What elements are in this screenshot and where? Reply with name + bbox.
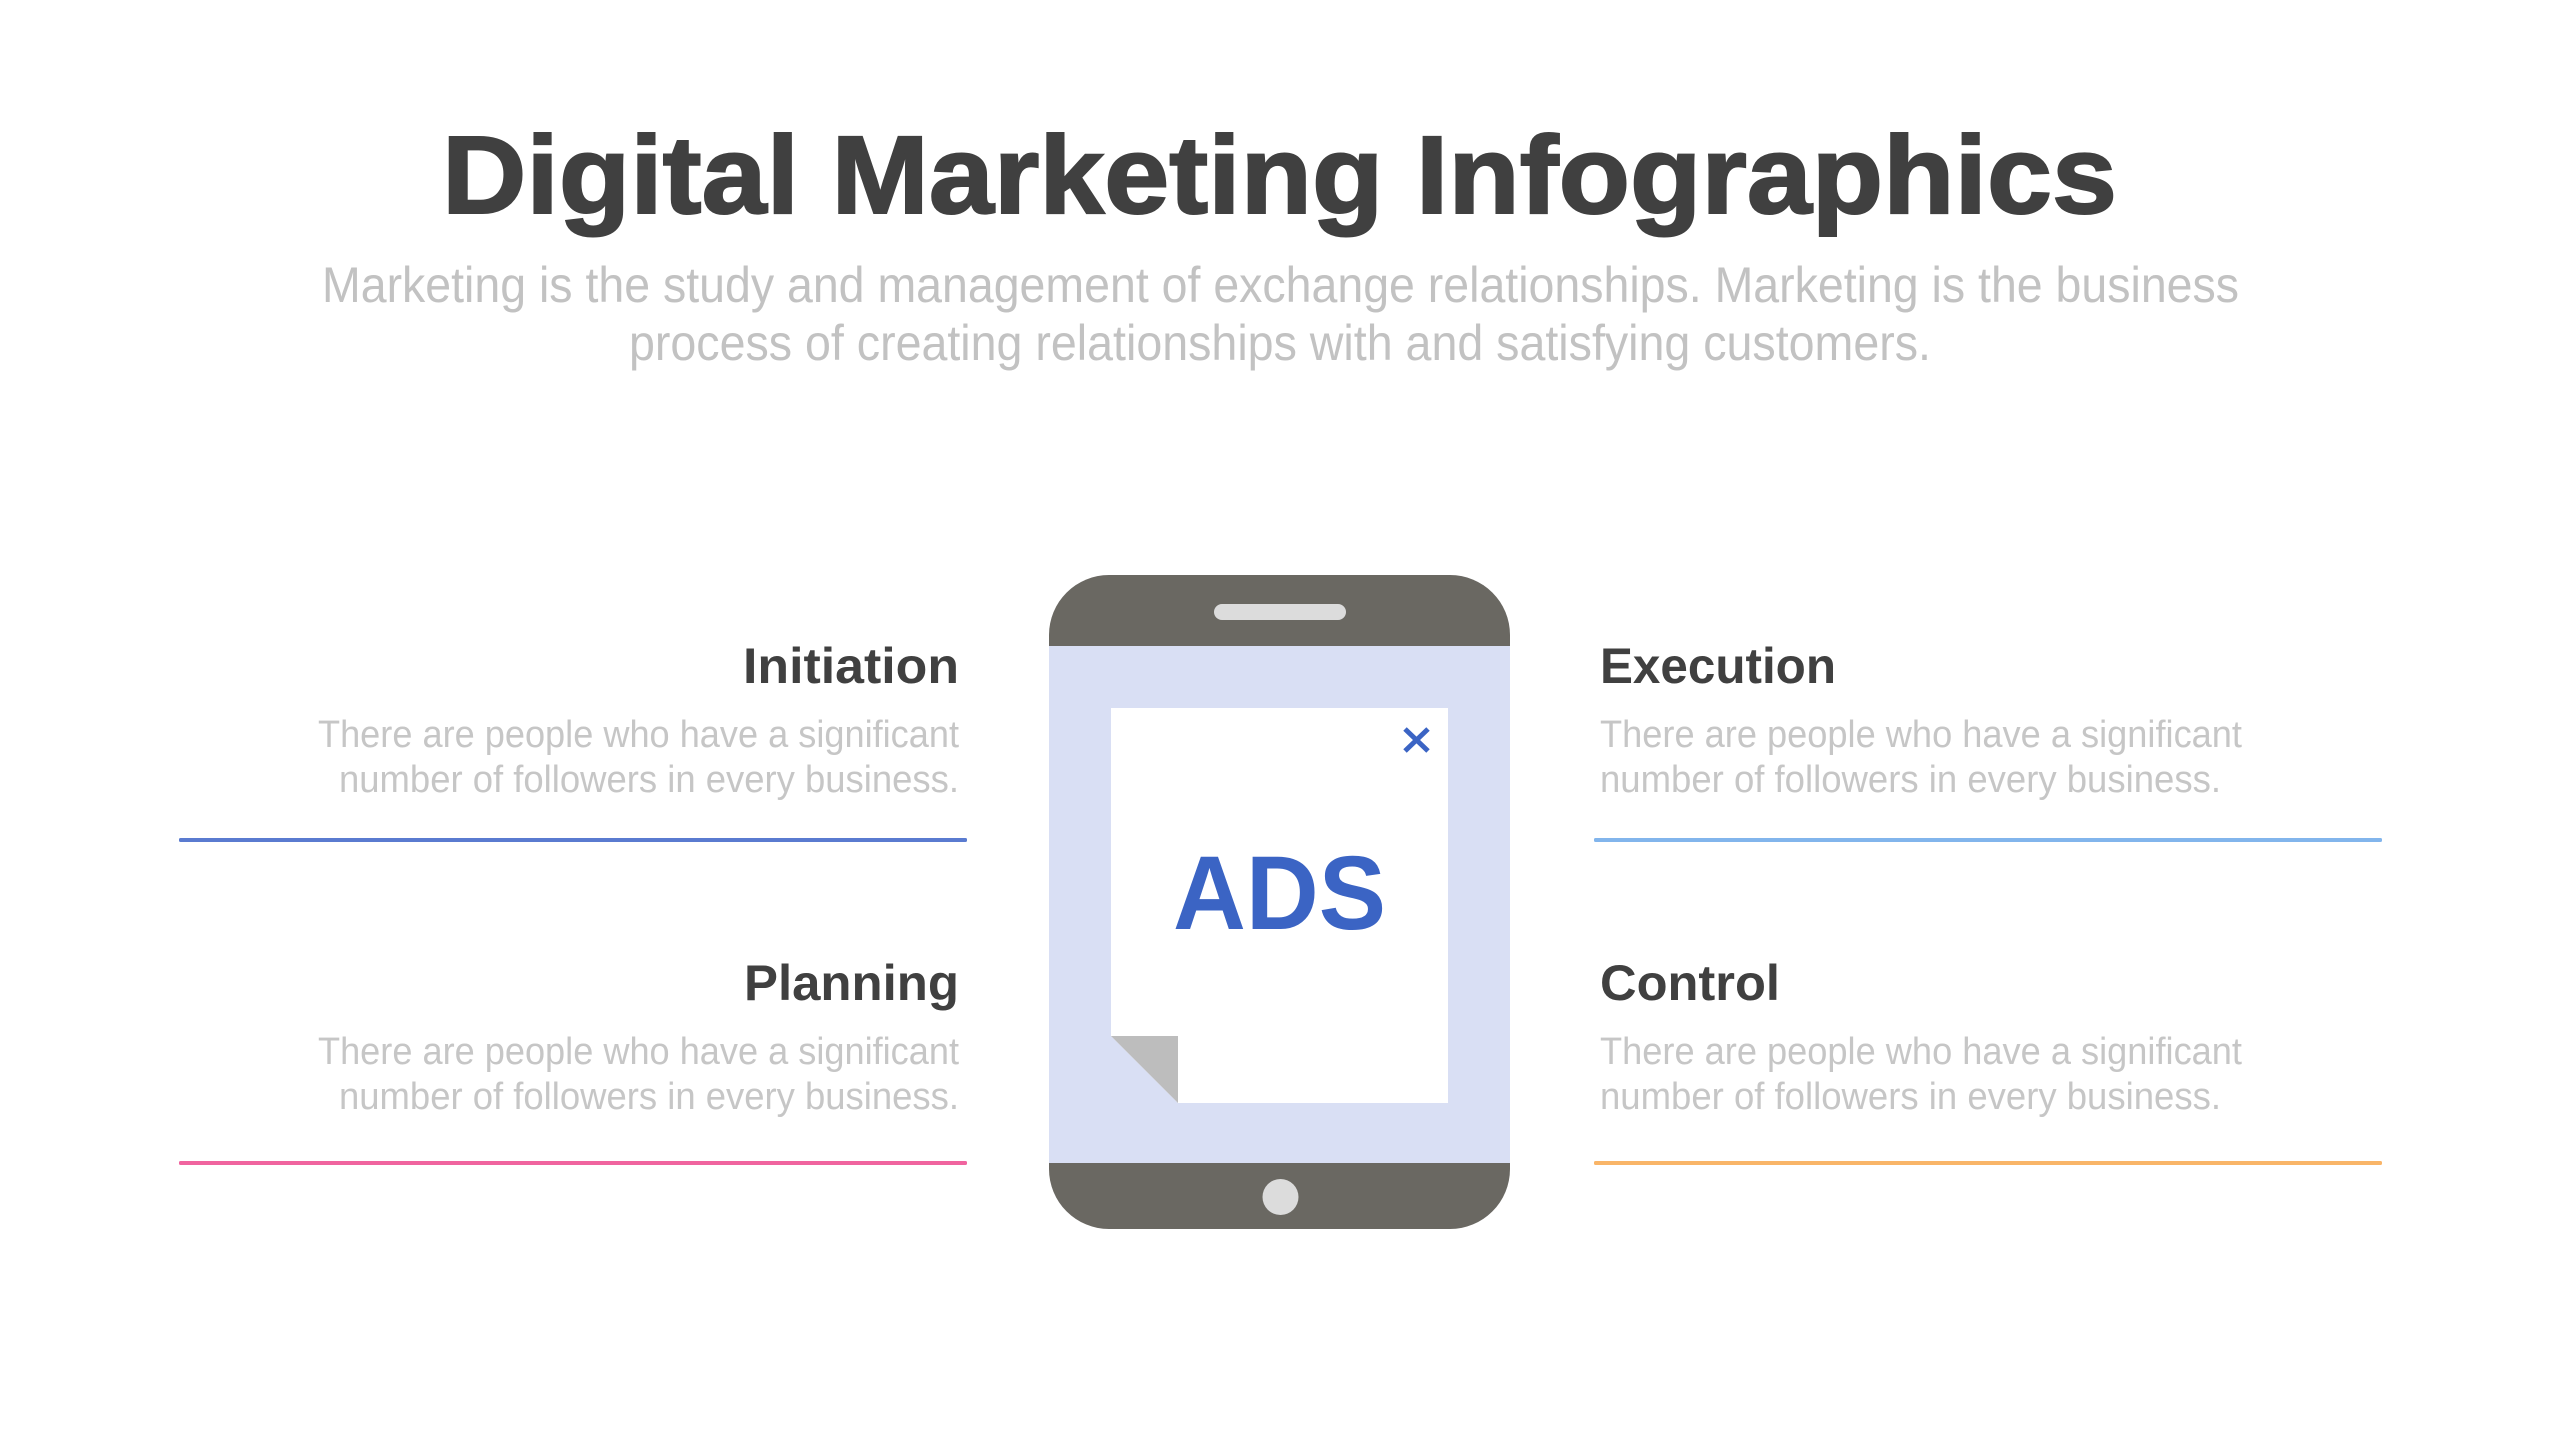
text block: initiation <box>318 714 959 801</box>
text block: control <box>1600 1031 2242 1118</box>
ad paper <box>1111 708 1448 1103</box>
heading: control: Control <box>1600 955 1780 1011</box>
text block: initiation: number of followers in every business. <box>339 759 959 801</box>
subtitle text <box>322 257 2239 371</box>
heading: initiation: Initiation <box>743 638 959 694</box>
panel: initiation <box>179 638 967 842</box>
text block: execution <box>1600 714 2242 801</box>
text block: execution: number of followers in every business. <box>1600 759 2221 801</box>
text block: planning: There are people who have a significant <box>318 1031 959 1073</box>
icon: page fold <box>1111 1036 1178 1103</box>
text block: planning: number of followers in every business. <box>339 1076 959 1118</box>
ad label: ADS <box>1173 835 1386 952</box>
panel: planning <box>179 955 967 1165</box>
icon: tablet speaker <box>1214 604 1346 620</box>
subtitle text: Marketing is the study and management of exchange relationships. Marketing is the business <box>322 257 2239 313</box>
text block: initiation: There are people who have a significant <box>318 714 959 756</box>
icon: home button <box>1262 1179 1298 1215</box>
panel: execution <box>1594 638 2382 842</box>
text block: planning <box>318 1031 959 1118</box>
text block: control: There are people who have a significant <box>1600 1031 2242 1073</box>
icon: tablet with ad <box>1049 575 1510 1229</box>
panel: control <box>1594 955 2382 1165</box>
icon: close x <box>1405 729 1428 751</box>
subtitle text: process of creating relationships with and satisfying customers. <box>629 315 1931 371</box>
text block: control: number of followers in every business. <box>1600 1076 2221 1118</box>
title: Digital Marketing Infographics <box>442 114 2117 237</box>
heading: execution: Execution <box>1600 638 1836 694</box>
text block: execution: There are people who have a significant <box>1600 714 2242 756</box>
heading: planning: Planning <box>744 955 959 1011</box>
